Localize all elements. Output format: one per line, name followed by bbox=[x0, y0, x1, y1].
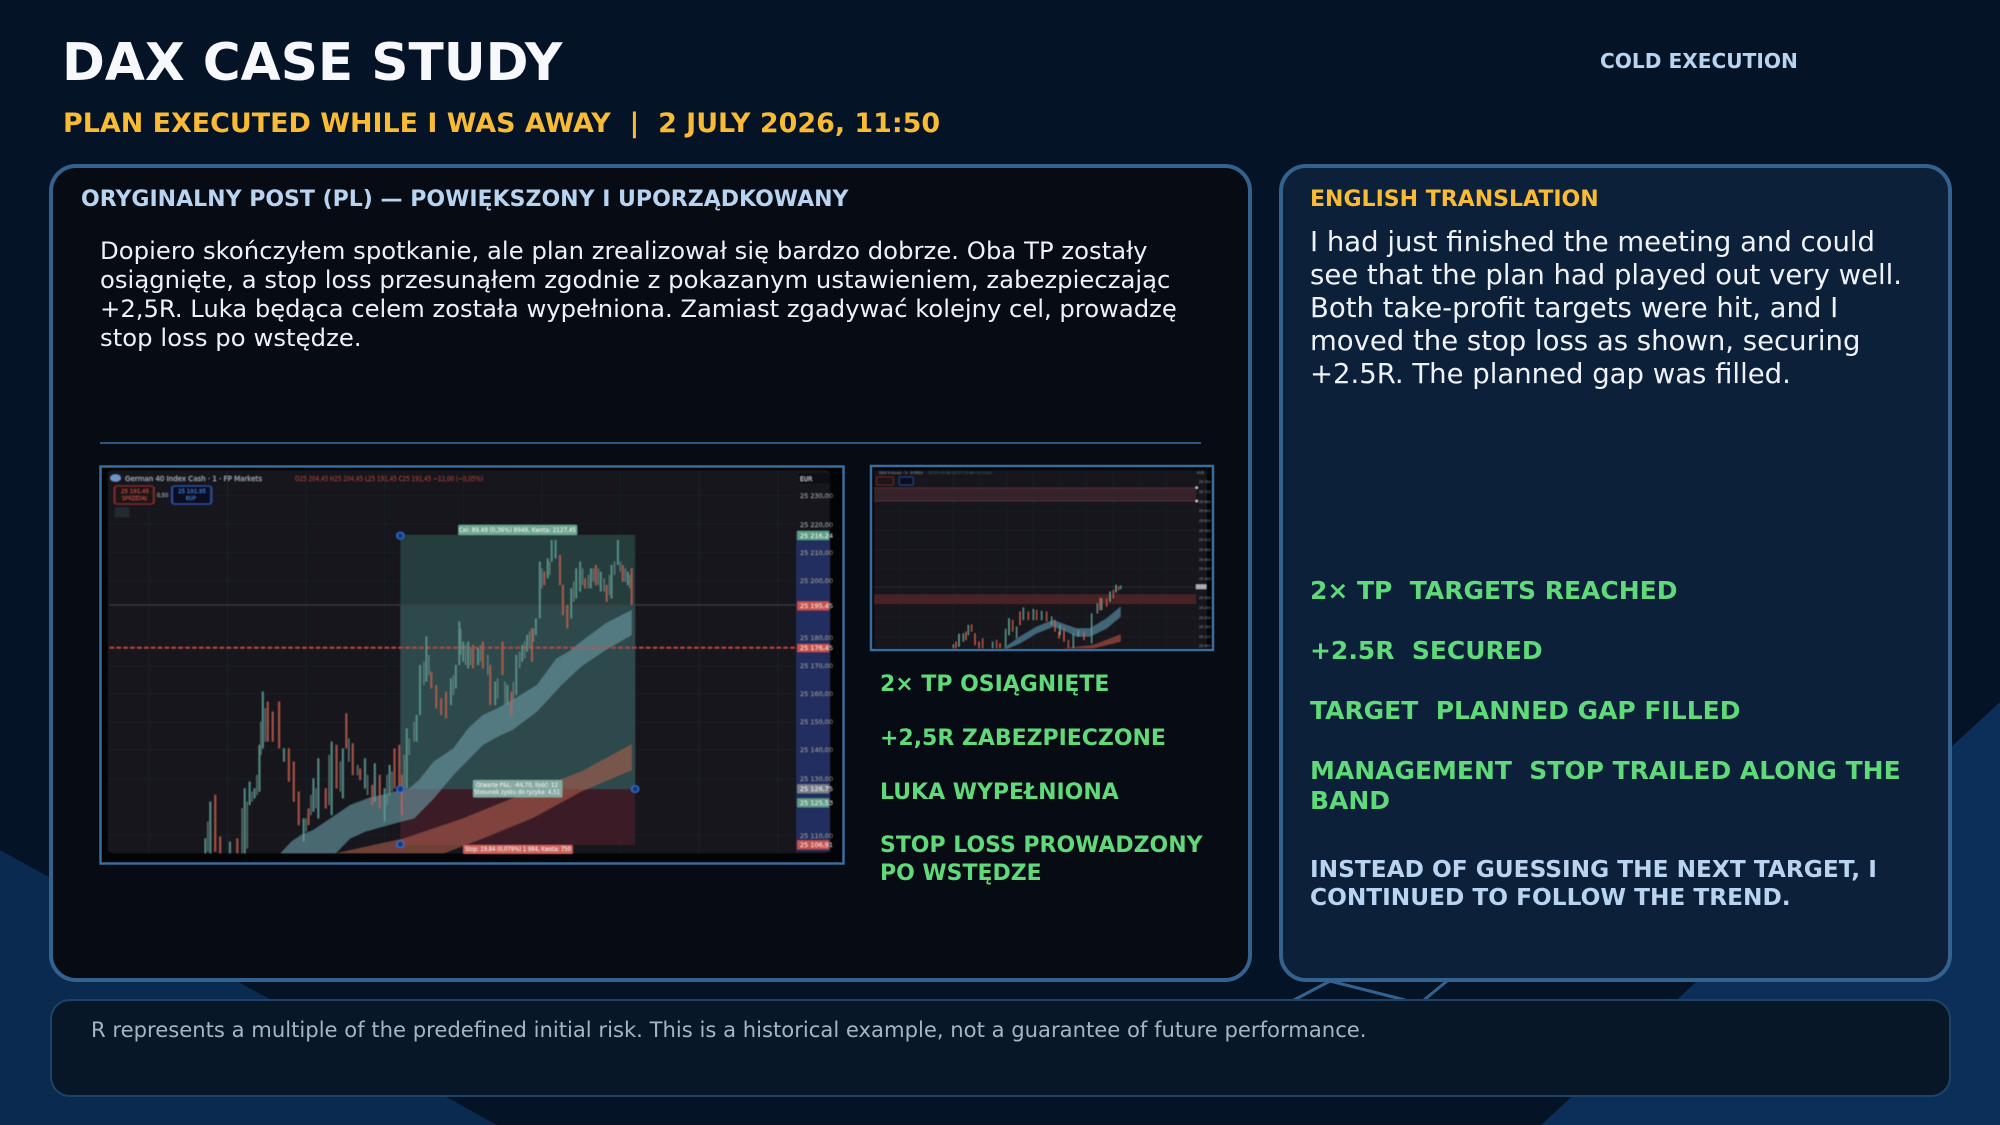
price axis labels: 25 106,91 bbox=[800, 841, 833, 849]
result: secured: +2,5R ZABEZPIECZONE bbox=[880, 726, 1166, 750]
small chart text: DAX Futures · 5 · EUREX bbox=[879, 471, 924, 475]
trade labels bbox=[459, 526, 576, 853]
title: DAX CASE STUDY bbox=[62, 33, 562, 93]
result: gap filled: TARGET PLANNED GAP FILLED bbox=[1310, 696, 1740, 725]
price axis labels: 25 216,24 bbox=[800, 532, 833, 540]
small chart text: EUR bbox=[1197, 471, 1205, 475]
small chart text: 25 480 bbox=[1199, 548, 1211, 552]
small chart text: 25 120 bbox=[1199, 635, 1211, 639]
price axis labels: 25 126,75 bbox=[800, 785, 833, 793]
small chart text: 25 280 bbox=[1199, 596, 1211, 600]
price axis labels bbox=[800, 492, 833, 849]
small chart text bbox=[879, 471, 1211, 648]
panel: English translation bbox=[1279, 164, 1952, 982]
price axis labels: 25 195,45 bbox=[800, 602, 833, 610]
price axis labels: 25 176,45 bbox=[800, 644, 833, 652]
trade labels: Otwarte P&L: -64,70, Ilość: 12 bbox=[476, 781, 558, 789]
text: original post body: Dopiero skończyłem spotkanie, ale plan zrealizował się bardzo dobrze. Oba TP zostały osiągnięte, a stop loss przesunąłem zgodnie z pokazanym ustawieniem, zabezpieczając +2,5R. Luka będąca celem została wypełniona. Zamiast zgadywać kolejny cel, prowadzę stop loss po wstędze. bbox=[100, 236, 1177, 352]
small chart text: 25 400 bbox=[1199, 567, 1211, 571]
price axis labels: 25 210,00 bbox=[800, 549, 833, 557]
closing statement: INSTEAD OF GUESSING THE NEXT TARGET, I CONTINUED TO FOLLOW THE TREND. bbox=[1310, 856, 1877, 911]
chart header text: EUR bbox=[800, 476, 812, 483]
result: stop loss: STOP LOSS PROWADZONY PO WSTĘDZE bbox=[880, 833, 1203, 886]
small chart text: 25 680 bbox=[1199, 500, 1211, 504]
small chart text: 25 560 bbox=[1199, 529, 1211, 533]
result: targets: 2× TP OSIĄGNIĘTE bbox=[880, 672, 1109, 697]
small chart text: 25 360 bbox=[1199, 577, 1211, 581]
price axis labels: 25 220,00 bbox=[800, 521, 833, 529]
green candles bbox=[205, 540, 628, 853]
tag: cold execution: COLD EXECUTION bbox=[1600, 48, 1798, 72]
small chart text: 25 520 bbox=[1199, 538, 1211, 542]
text: English body: I had just finished the meeting and could see that the plan had played out very well. Both take-profit targets were hit, and I moved the stop loss as shown, securing +2.5R. The planned gap was filled. bbox=[1310, 226, 1902, 390]
small chart text: 25 720 bbox=[1199, 490, 1211, 494]
small chart text: 25 160 bbox=[1199, 625, 1211, 629]
candles bbox=[953, 585, 1121, 648]
small chart text: 25 640 bbox=[1199, 509, 1211, 513]
small chart text: 25 200 bbox=[1199, 616, 1211, 620]
small chart text: 25 440 bbox=[1199, 558, 1211, 562]
chart header text bbox=[121, 475, 812, 502]
price axis labels: 25 125,53 bbox=[800, 799, 833, 807]
small chart text: 25 240 bbox=[1199, 606, 1211, 610]
trade labels: Stosunek zysku do ryzyka: 4,51 bbox=[474, 788, 560, 796]
price axis labels: 25 180,00 bbox=[800, 634, 833, 642]
result: targets reached: 2× TP TARGETS REACHED bbox=[1310, 576, 1677, 605]
callouts: Polish results bbox=[880, 672, 1203, 886]
price axis labels: 25 170,00 bbox=[800, 662, 833, 670]
price axis labels: 25 130,00 bbox=[800, 775, 833, 783]
small chart text: O25 377 H25 380 L25 377 C25 380 +3 (+0,01%) bbox=[928, 471, 993, 475]
result: management: MANAGEMENT STOP TRAILED ALONG THE BAND bbox=[1310, 756, 1901, 815]
panel: footer note bbox=[50, 999, 1951, 1096]
extra candles bbox=[208, 562, 630, 853]
panel: original post bbox=[49, 164, 1252, 982]
chart header text: SPRZEDAJ bbox=[122, 496, 147, 502]
callouts: English results bbox=[1310, 576, 1901, 815]
result: secured: +2.5R SECURED bbox=[1310, 636, 1543, 665]
price axis labels: 25 110,00 bbox=[800, 832, 833, 840]
price axis labels: 25 150,00 bbox=[800, 718, 833, 726]
chart header text: 25 191,45 bbox=[121, 489, 149, 495]
footer text: R represents a multiple of the predefined initial risk. This is a historical example, not a guarantee of future performance. bbox=[91, 1017, 1367, 1042]
trade labels: Stop: 19,84 (0,079%) 1 984, Kwota: 750 bbox=[465, 845, 571, 853]
heading: English translation: ENGLISH TRANSLATION bbox=[1310, 186, 1599, 212]
small chart text: 25 600 bbox=[1199, 519, 1211, 523]
red candles bbox=[215, 555, 632, 853]
chart header text: 0,50 bbox=[157, 493, 168, 499]
small chart text: 25 760 bbox=[1199, 480, 1211, 484]
chart header text: O25 204,45 H25 204,45 L25 191,45 C25 191,45 −12,00 (−0,05%) bbox=[295, 475, 483, 483]
heading: original post: ORYGINALNY POST (PL) — POWIĘKSZONY I UPORZĄDKOWANY bbox=[81, 186, 849, 212]
price axis labels: 25 230,00 bbox=[800, 492, 833, 500]
price axis labels: 25 160,00 bbox=[800, 690, 833, 698]
result: gap: LUKA WYPEŁNIONA bbox=[880, 780, 1119, 804]
chart header text: KUP bbox=[186, 496, 196, 502]
chart header text: German 40 Index Cash · 1 · FP Markets bbox=[125, 475, 262, 483]
price axis labels: 25 140,00 bbox=[800, 746, 833, 754]
subtitle: PLAN EXECUTED WHILE I WAS AWAY | 2 JULY 2026, 11:50 bbox=[63, 108, 940, 139]
small chart text: 25 080 bbox=[1199, 644, 1211, 648]
trade labels: Cel: 89,49 (0,36%) 8949, Kwota: 2127,45 bbox=[459, 526, 576, 534]
price axis labels: 25 200,00 bbox=[800, 577, 833, 585]
chart header text: 25 191,95 bbox=[178, 489, 206, 495]
divider bbox=[100, 442, 1201, 444]
